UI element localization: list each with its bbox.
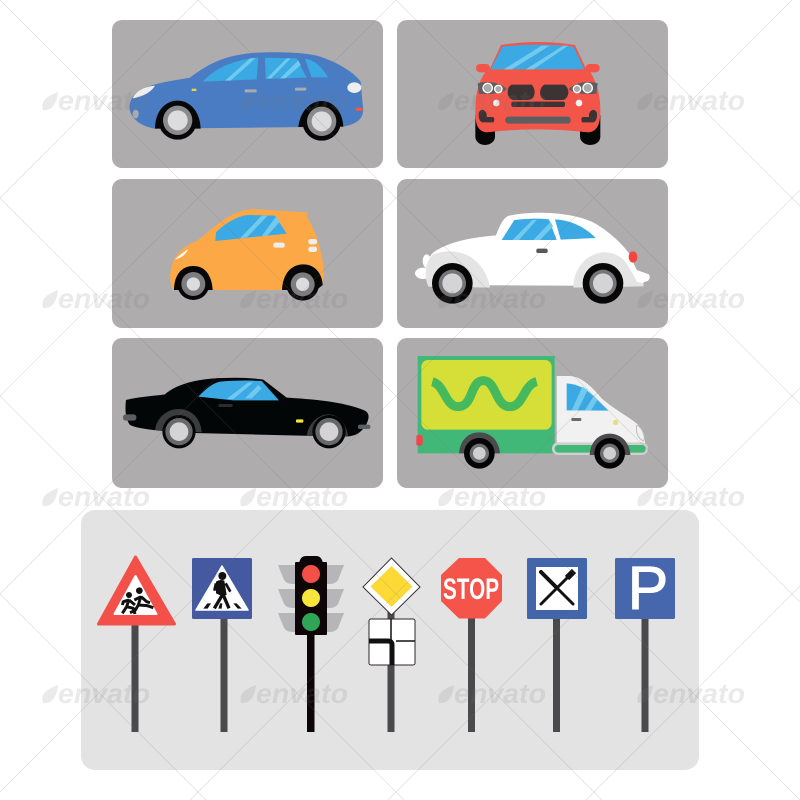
watermark: envato repeated: envato — [256, 678, 348, 709]
watermark: envato repeated: envato — [653, 85, 745, 116]
watermark: envato repeated: envato — [454, 678, 546, 709]
watermark: envato repeated: envato — [58, 283, 150, 314]
sign: restaurant — [527, 558, 587, 732]
panel: delivery truck — [397, 338, 668, 488]
icon: green delivery truck — [416, 356, 648, 469]
sign: parking: P — [628, 554, 668, 622]
watermark: envato repeated: envato — [653, 481, 745, 512]
watermark: envato repeated: envato — [256, 85, 348, 116]
watermark: envato repeated — [42, 85, 745, 709]
panel: road signs — [81, 510, 699, 770]
sign: parking — [615, 554, 675, 732]
panel: orange car — [112, 179, 383, 328]
panel: black car — [112, 338, 383, 488]
panel: red car — [397, 20, 668, 168]
watermark: envato repeated: envato — [454, 481, 546, 512]
sign: pedestrian crossing — [192, 558, 252, 732]
watermark: envato repeated: envato — [653, 678, 745, 709]
sign: stop: STOP — [443, 573, 499, 606]
panel: white car — [397, 179, 668, 328]
watermark: envato repeated: envato — [58, 85, 150, 116]
sign: traffic light — [278, 556, 344, 732]
sign: children crossing — [98, 557, 174, 732]
icon: black muscle car — [123, 378, 370, 448]
watermark: envato repeated: envato — [58, 481, 150, 512]
icon: orange small car — [170, 209, 324, 301]
icon: blue hatchback car — [129, 52, 363, 141]
sign: priority road with plate — [363, 558, 420, 732]
panel: blue car — [112, 20, 383, 168]
icon: white beetle car — [415, 213, 650, 304]
watermark: envato repeated: envato — [256, 283, 348, 314]
watermark: envato repeated: envato — [454, 283, 546, 314]
watermark: envato repeated: envato — [454, 85, 546, 116]
watermark: envato repeated: envato — [58, 678, 150, 709]
icon: red car front view — [475, 42, 600, 145]
watermark: envato repeated: envato — [256, 481, 348, 512]
sign: stop — [441, 558, 502, 732]
watermark: envato repeated: envato — [653, 283, 745, 314]
